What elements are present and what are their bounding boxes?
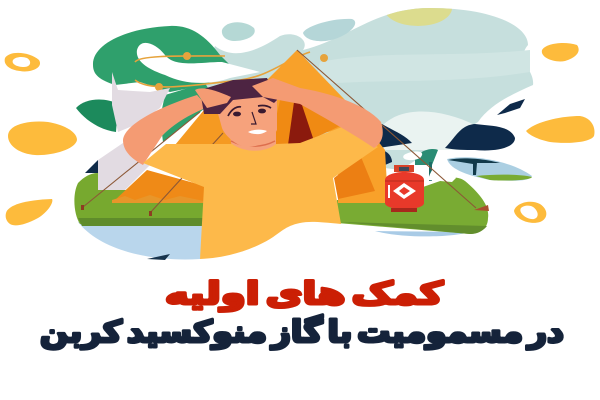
tent peg right xyxy=(474,205,489,211)
white swoosh xyxy=(428,150,475,182)
eyebrows xyxy=(228,106,271,116)
sky blob xyxy=(200,0,533,170)
green tree foliage xyxy=(76,26,328,142)
water dark patch xyxy=(147,254,170,260)
grass tufts xyxy=(112,195,204,203)
shirt xyxy=(143,127,378,259)
dark trees xyxy=(375,99,525,165)
left grass dark band xyxy=(78,218,205,226)
neck collar shadow xyxy=(231,141,275,146)
hair xyxy=(200,78,277,114)
tent pegs left xyxy=(81,205,152,216)
illustration: camping scene xyxy=(74,0,533,260)
right arm xyxy=(252,78,383,148)
right water strip xyxy=(375,231,470,236)
right grass xyxy=(337,178,488,234)
left hand xyxy=(195,88,231,108)
left grass xyxy=(74,173,205,225)
distant lake xyxy=(85,160,98,173)
island with tree xyxy=(447,157,532,181)
face xyxy=(217,92,277,147)
green pine tree xyxy=(403,149,438,181)
subtitle: در مسمومیت با گاز منوکسید کربن xyxy=(40,314,564,350)
tent ropes xyxy=(83,50,476,213)
mouth xyxy=(248,130,267,134)
water xyxy=(78,222,205,259)
right grass dark band xyxy=(340,222,487,234)
gas cylinder xyxy=(385,165,424,212)
tent xyxy=(115,50,388,203)
grey building and tree trunk xyxy=(98,72,170,190)
title: کمک های اولیه xyxy=(165,276,444,312)
man xyxy=(123,78,383,259)
eyes xyxy=(233,109,266,116)
left arm xyxy=(123,95,208,165)
decorative yellow blobs xyxy=(5,43,594,225)
nose xyxy=(251,112,256,124)
neck xyxy=(230,132,276,153)
